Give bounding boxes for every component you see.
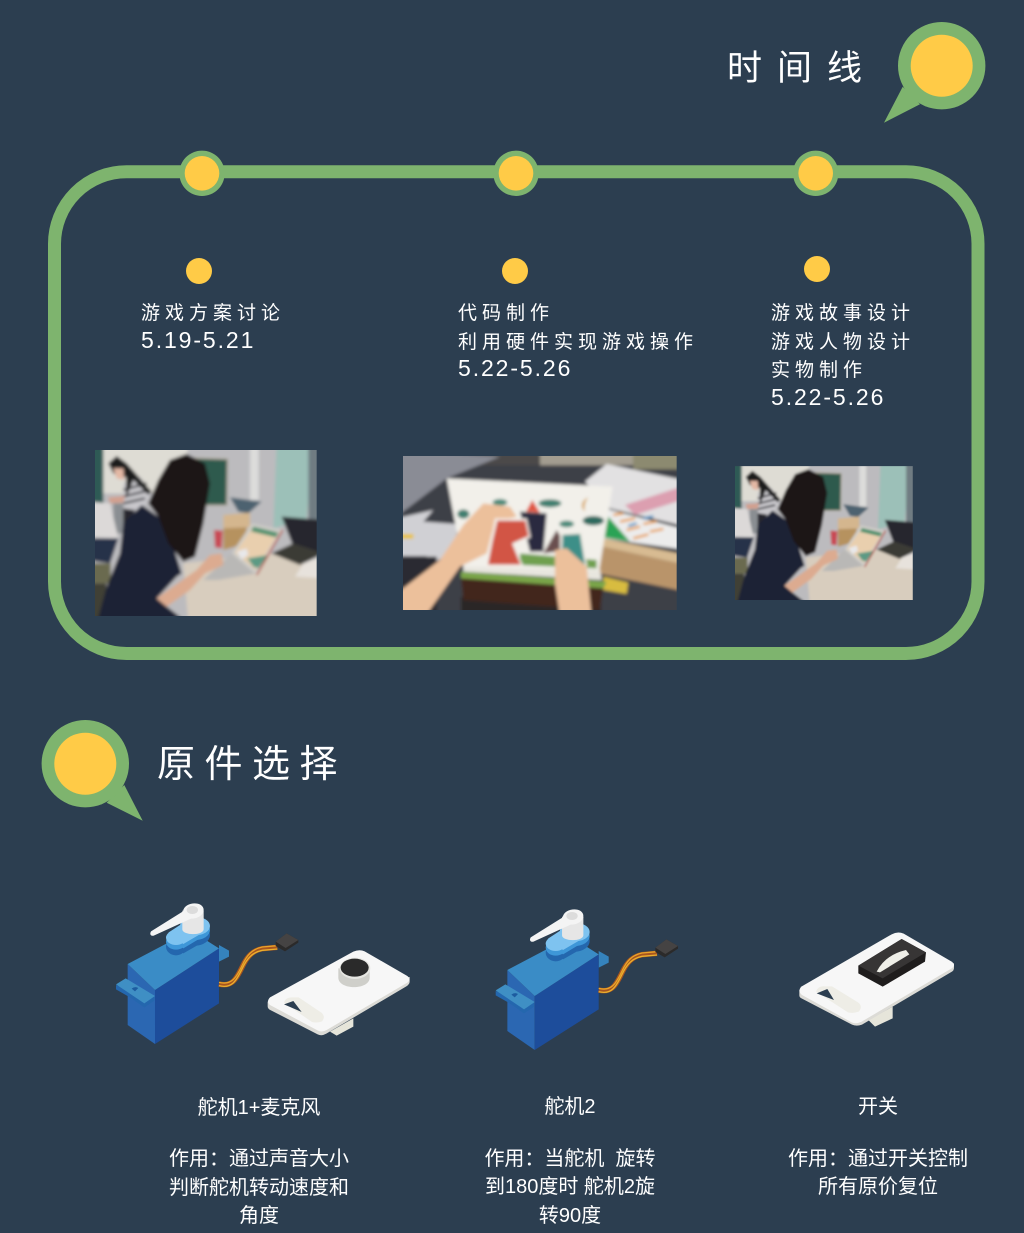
text: stage 2: 利用硬件实现游戏操作 (458, 332, 698, 353)
text: stage 2 (458, 303, 698, 381)
icon: components speech bubble (42, 720, 143, 821)
stage 1 dot (186, 258, 212, 284)
caption: servo 2: 转90度 (539, 1205, 601, 1227)
text: stage 3: 实物制作 (771, 360, 867, 381)
caption: switch: 开关 (858, 1096, 898, 1118)
timeline rounded frame (54, 172, 978, 654)
caption: switch: 作用：通过开关控制 (788, 1148, 968, 1170)
text: stage 2: 5.22-5.26 (458, 355, 572, 381)
caption: switch: 所有原价复位 (818, 1176, 938, 1198)
caption: switch (788, 1096, 968, 1198)
caption: servo 2: 作用：当舵机 旋转 (484, 1148, 656, 1170)
text: stage 2: 代码制作 (458, 303, 554, 324)
stage 2 dot (502, 258, 528, 284)
text: stage 1: 5.19-5.21 (141, 327, 255, 353)
text: stage 1 (141, 302, 285, 353)
caption: servo 1 and microphone: 角度 (239, 1205, 279, 1227)
icon: servo 1 (116, 903, 298, 1044)
timeline node 2 (493, 151, 539, 196)
caption: servo 2 (484, 1096, 656, 1227)
stage 3 dot (804, 256, 830, 282)
caption: servo 1 and microphone: 判断舵机转动速度和 (169, 1177, 349, 1199)
icon: switch board (799, 932, 954, 1027)
icon: microphone board (268, 950, 410, 1036)
timeline node 3 (793, 151, 838, 196)
timeline node 1 (179, 151, 225, 196)
photo: hands holding the pop-up game (403, 456, 677, 610)
caption: servo 1 and microphone (169, 1097, 349, 1227)
text: stage 3 (771, 303, 915, 410)
text: stage 3: 游戏人物设计 (771, 332, 915, 353)
photo: discussion at the laptop, second view (726, 458, 921, 609)
photo: discussion at the laptop (83, 440, 327, 627)
title: component selection: 原件选择 (157, 744, 347, 786)
text: stage 3: 游戏故事设计 (771, 303, 915, 324)
caption: servo 1 and microphone: 舵机1+麦克风 (198, 1097, 320, 1119)
title: timeline: 时间线 (727, 49, 877, 88)
caption: servo 2: 舵机2 (544, 1096, 596, 1118)
caption: servo 1 and microphone: 作用：通过声音大小 (169, 1148, 349, 1170)
text: stage 1: 游戏方案讨论 (141, 303, 285, 324)
icon: timeline speech bubble (884, 22, 985, 123)
icon: servo 2 (496, 909, 678, 1050)
text: stage 3: 5.22-5.26 (771, 384, 885, 410)
caption: servo 2: 到180度时 舵机2旋 (485, 1176, 655, 1198)
